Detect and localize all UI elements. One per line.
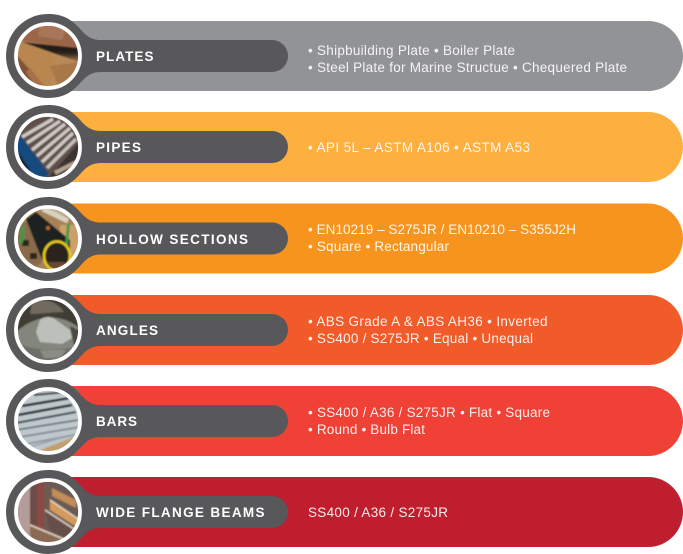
band: plates xyxy=(60,21,683,91)
panel: bars xyxy=(6,379,683,463)
label: plates: PLATES xyxy=(96,49,154,64)
panel: angles xyxy=(6,288,683,372)
label: hollow sections: HOLLOW SECTIONS xyxy=(96,232,248,247)
photo ring: pipes xyxy=(16,115,80,179)
panel: angles: • SS400 / S275JR • Equal • Unequal xyxy=(308,331,533,346)
panel: bars: • Round • Bulb Flat xyxy=(308,422,425,437)
label: wide flange beams: WIDE FLANGE BEAMS xyxy=(96,505,264,520)
text: pipes specs: • API 5L – ASTM A106 • ASTM A53 xyxy=(308,140,530,155)
connector and label pill: hollow sections xyxy=(6,197,288,281)
photo: angles xyxy=(18,300,78,360)
panel: hollow sections xyxy=(6,197,683,281)
panel: plates xyxy=(6,14,683,98)
label: angles: ANGLES xyxy=(96,323,158,338)
photo: plates xyxy=(18,26,78,86)
band: angles xyxy=(60,295,683,365)
connector and label pill: wide flange beams xyxy=(6,470,288,554)
band: bars xyxy=(60,386,683,456)
connector and label pill: plates xyxy=(6,14,288,98)
text: plates specs: • Shipbuilding Plate • Boiler Plate xyxy=(308,43,515,58)
panel: pipes xyxy=(6,105,683,189)
label: pipes: PIPES xyxy=(96,140,141,155)
band: wide flange beams xyxy=(60,477,683,547)
panel: wide flange beams xyxy=(6,470,683,554)
photo: pipes xyxy=(18,117,78,177)
label: bars: BARS xyxy=(96,414,137,429)
band: pipes xyxy=(60,112,683,182)
photo: bars xyxy=(18,390,78,452)
text: angles specs: • ABS Grade A & ABS AH36 • Inverted xyxy=(308,314,548,329)
connector and label pill: pipes xyxy=(6,105,288,189)
text: hollow sections specs: • EN10219 – S275JR / EN10210 – S355J2H xyxy=(308,222,576,237)
photo ring: wide flange beams xyxy=(16,480,80,544)
text: bars specs: • SS400 / A36 / S275JR • Flat • Square xyxy=(308,405,550,420)
photo ring: plates xyxy=(16,24,80,88)
panel: plates: • Steel Plate for Marine Structue • Chequered Plate xyxy=(308,60,627,75)
text: wide flange beams specs: SS400 / A36 / S275JR xyxy=(308,505,448,520)
panel: hollow sections: • Square • Rectangular xyxy=(308,239,450,254)
connector and label pill: angles xyxy=(6,288,288,372)
connector and label pill: bars xyxy=(6,379,288,463)
photo ring: bars xyxy=(16,389,80,453)
photo ring: hollow sections xyxy=(16,207,80,271)
photo: wide flange beams xyxy=(18,482,78,542)
photo ring: angles xyxy=(16,298,80,362)
photo: hollow sections xyxy=(18,208,78,270)
band: hollow sections xyxy=(60,204,683,274)
